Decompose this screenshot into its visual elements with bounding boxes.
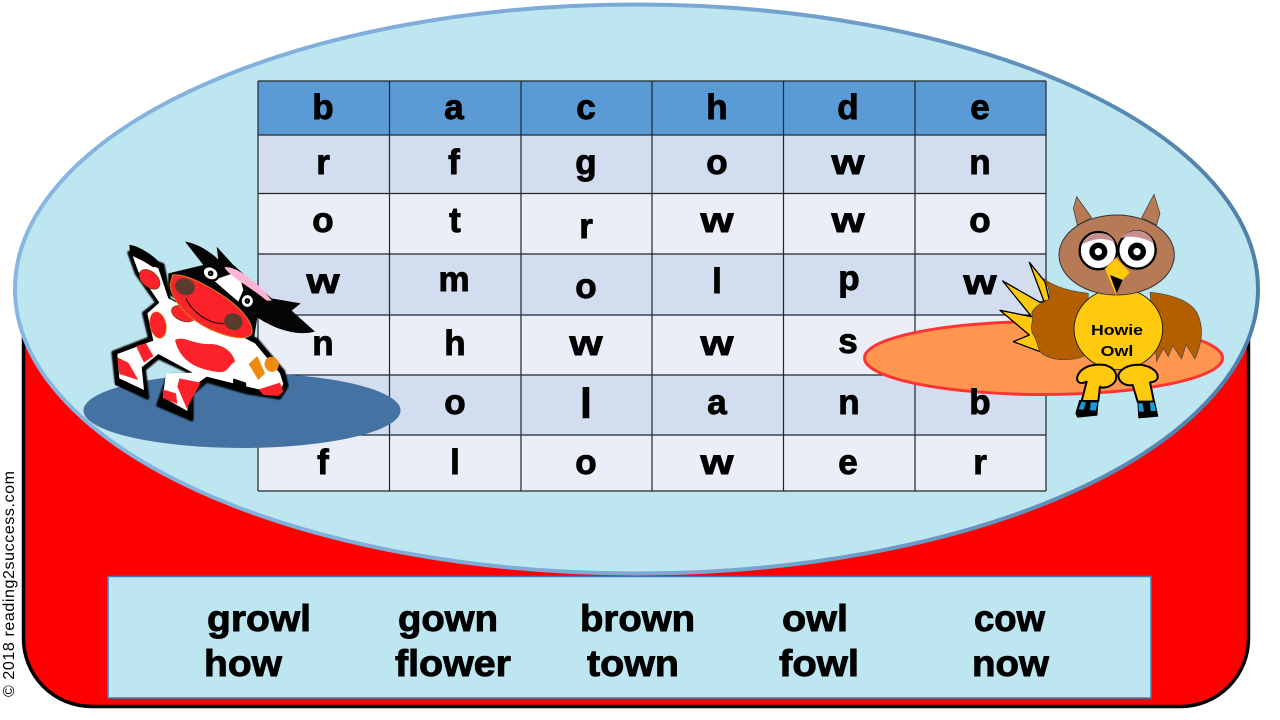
- grid letters: c: [576, 88, 596, 127]
- word list words: fowl: [779, 643, 859, 684]
- cow eyes: [200, 263, 254, 308]
- cow soft outline: [113, 253, 287, 419]
- grid letters: m: [438, 260, 470, 299]
- grid letters: n: [838, 383, 860, 422]
- grid letters: r: [316, 143, 330, 182]
- owl ears: [1073, 194, 1160, 225]
- word list words: gown: [398, 598, 498, 639]
- owl eyes: [1080, 231, 1156, 269]
- cow face: [170, 275, 252, 338]
- grid letters: e: [838, 443, 858, 482]
- grid letters: o: [312, 201, 334, 240]
- cow red spots: [117, 266, 283, 408]
- grid letters: a: [444, 88, 464, 127]
- grid letters: o: [706, 143, 728, 182]
- grid letters: w: [962, 263, 997, 302]
- grid letters: r: [973, 443, 987, 482]
- red rounded base panel: [23, 300, 1249, 707]
- grid letter b above the orange ellipse: b: [969, 383, 991, 422]
- grid letters: w: [830, 201, 865, 240]
- grid letters: w: [699, 324, 734, 363]
- icon: Howie Owl character: [1000, 194, 1202, 418]
- grid letters: w: [830, 143, 865, 182]
- grid letters: h: [444, 324, 466, 363]
- grid letters: o: [575, 443, 597, 482]
- blue shadow ellipse under cow: [84, 373, 400, 448]
- grid letters: n: [969, 143, 991, 182]
- owl beak: [1105, 258, 1130, 296]
- grid letters: r: [579, 207, 593, 246]
- word search grid: [258, 81, 1046, 491]
- copyright notice: © 2018 reading2success.com: [1, 471, 18, 697]
- cow body and limbs: [117, 256, 283, 412]
- word list words: brown: [580, 598, 695, 639]
- grid letters: t: [449, 201, 461, 240]
- grid letters: e: [970, 88, 990, 127]
- cow head and ears: [168, 242, 315, 338]
- word list words: now: [972, 643, 1049, 684]
- cow feet: [115, 378, 247, 421]
- grid letters: s: [838, 322, 858, 361]
- owl name label: [1091, 323, 1143, 360]
- owl name label: Owl: [1101, 344, 1133, 360]
- grid letters: a: [707, 383, 727, 422]
- grid letters: [305, 88, 997, 482]
- cow nostrils and smile: [173, 275, 245, 333]
- grid letters: w: [568, 324, 603, 363]
- word list words: [204, 598, 1049, 684]
- grid letters: w: [305, 262, 340, 301]
- word list words: owl: [782, 598, 848, 639]
- owl body: [1074, 288, 1163, 370]
- grid letters: o: [969, 201, 991, 240]
- grid letters: w: [699, 201, 734, 240]
- orange shadow ellipse under owl: [864, 322, 1222, 394]
- grid letters: h: [706, 88, 728, 127]
- grid letters: f: [448, 143, 460, 182]
- word list words: town: [587, 643, 679, 684]
- grid letters: l: [580, 380, 592, 427]
- grid letters: b: [312, 88, 334, 127]
- grid letters: g: [575, 143, 597, 182]
- cow pink forelock: [224, 267, 272, 301]
- owl feet: [1075, 400, 1158, 418]
- grid letters: o: [575, 267, 597, 306]
- cow orange patches: [249, 356, 265, 380]
- grid letters: p: [838, 259, 860, 298]
- icon: cow character: [113, 242, 315, 421]
- word list words: cow: [974, 598, 1045, 639]
- owl mouth: [1110, 275, 1123, 293]
- word list words: how: [204, 643, 282, 684]
- owl legs: [1077, 365, 1158, 402]
- grid letters: f: [317, 443, 329, 482]
- owl name label: Howie: [1091, 323, 1143, 339]
- grid letters: d: [837, 88, 859, 127]
- owl right wing: [1150, 292, 1202, 362]
- grid letters: l: [712, 262, 722, 301]
- word list words: growl: [207, 598, 311, 639]
- grid letters: w: [699, 443, 734, 482]
- word list panel: [108, 576, 1151, 698]
- owl left wing feathers: [1000, 262, 1057, 352]
- owl left wing: [1031, 278, 1088, 360]
- cow raised hoof: [129, 245, 161, 267]
- cow white forehead: [213, 272, 243, 302]
- light blue oval background: [15, 4, 1258, 574]
- grid letters: o: [444, 383, 466, 422]
- grid letters: n: [312, 324, 334, 363]
- grid letters: l: [450, 443, 460, 482]
- owl head: [1059, 215, 1174, 295]
- word list words: flower: [395, 643, 511, 684]
